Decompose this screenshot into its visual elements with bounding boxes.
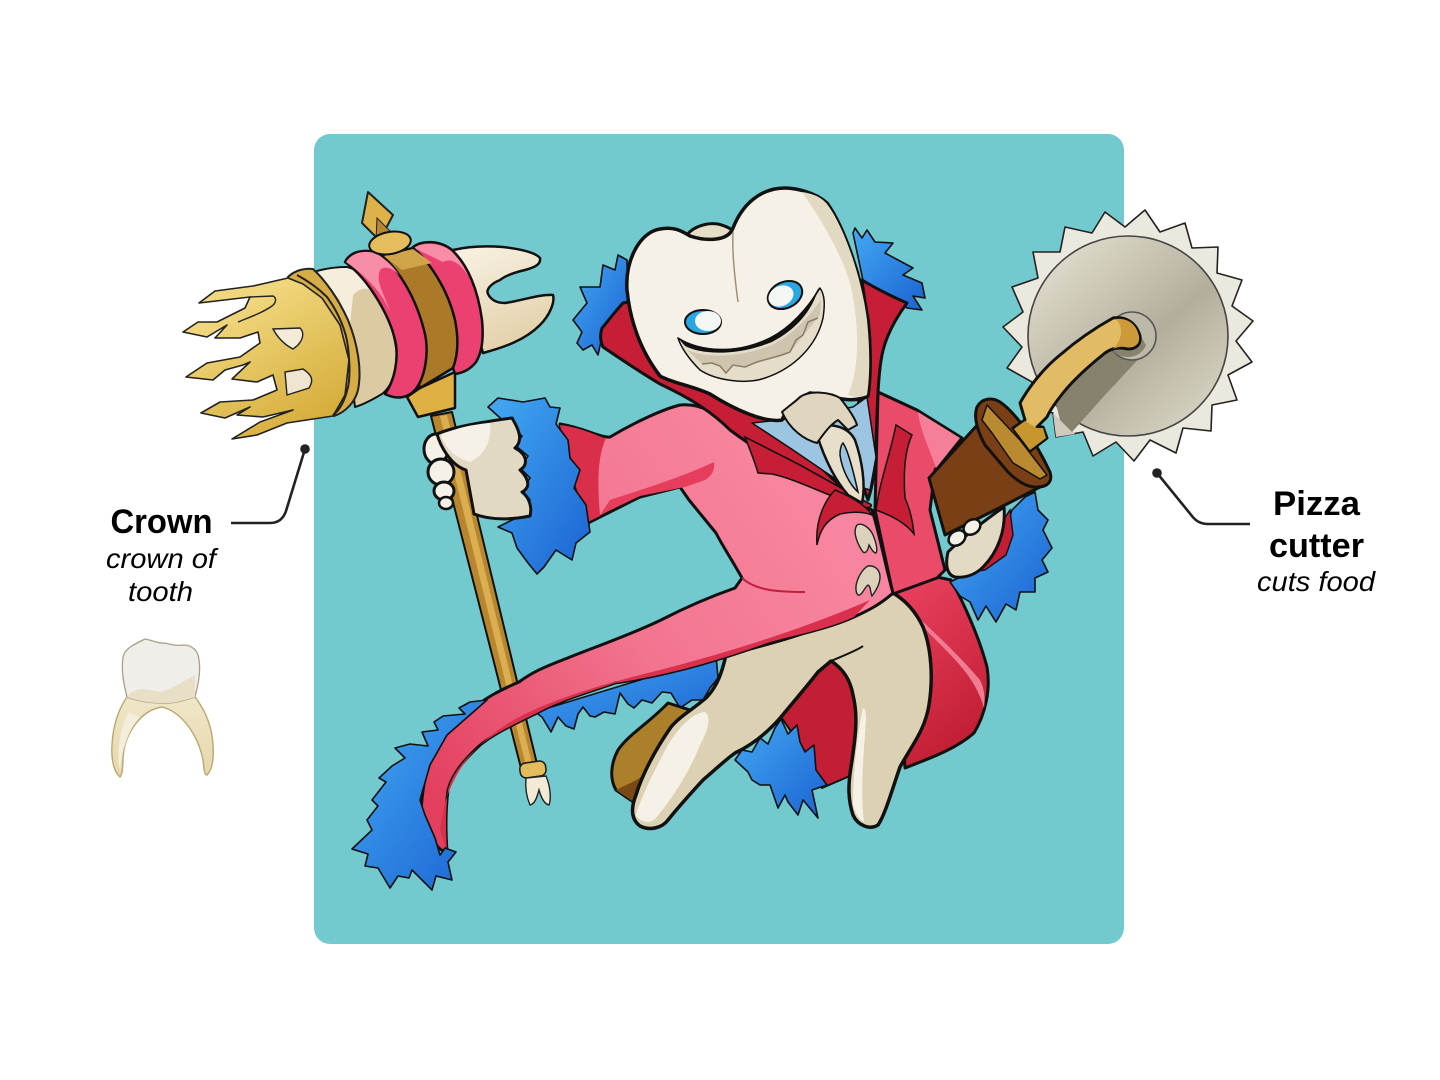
wooden club	[612, 703, 690, 801]
lower lapel red	[817, 490, 872, 545]
outer tail	[893, 577, 988, 768]
left sleeve cuff fur	[488, 398, 590, 574]
coat right side and shoulder	[875, 392, 962, 594]
right lapel red	[876, 425, 914, 534]
bottom ring	[519, 760, 547, 779]
root shape	[633, 593, 931, 828]
head shape	[627, 188, 870, 420]
mouth inner shade	[687, 300, 821, 373]
tie roots	[817, 425, 864, 503]
tie: tooth cravat	[782, 393, 864, 503]
description line 1: crown of	[106, 543, 219, 574]
wheel serrated edge	[1003, 210, 1253, 461]
cream segment	[317, 267, 397, 407]
wheel inner disc	[1028, 236, 1228, 436]
right root highlight	[853, 708, 866, 822]
finger 4	[439, 497, 453, 509]
leader dot	[300, 444, 310, 454]
tie knot	[782, 393, 857, 443]
coat buttons: small teeth	[855, 524, 880, 596]
knob	[367, 229, 413, 257]
finger 1	[424, 434, 448, 464]
hub shadow	[1112, 335, 1146, 357]
label: Pizza cutter	[1257, 485, 1376, 597]
root inner light	[118, 712, 140, 770]
collar and lapels	[601, 280, 914, 545]
handle body	[929, 422, 1040, 535]
heading: Crown: Crown	[110, 503, 212, 541]
tail fold highlight	[893, 593, 985, 708]
tooth crown	[122, 639, 200, 703]
finger 3	[434, 482, 454, 500]
left root highlight	[636, 712, 709, 822]
crown gold with spikes	[183, 278, 349, 439]
shaft highlight	[440, 415, 533, 770]
collar fur right	[853, 228, 925, 310]
lower sleeve shade	[600, 462, 714, 515]
tooth roots	[112, 697, 213, 777]
legs: tooth roots	[633, 593, 931, 828]
cap gold rim	[982, 405, 1047, 479]
finger 2	[428, 459, 454, 485]
pink ring left highlight	[346, 252, 403, 312]
coat right highlight	[918, 412, 960, 468]
right glove hand	[946, 507, 1004, 577]
icon: molar tooth	[112, 639, 213, 777]
head shade right	[802, 192, 869, 397]
label: Crown	[106, 503, 219, 607]
smile mouth	[678, 288, 824, 381]
crown band	[288, 269, 360, 416]
collar fur left	[573, 255, 628, 355]
tail end fur	[352, 700, 487, 890]
tail fur behind coat	[535, 655, 718, 732]
finger lower	[946, 527, 968, 549]
spike inner outline	[238, 296, 276, 322]
right cuff red lining	[972, 510, 1013, 572]
cuff-end dark red	[560, 425, 606, 522]
left collar	[601, 300, 858, 503]
upper button	[855, 524, 877, 553]
leader path	[1157, 473, 1250, 524]
palm	[437, 418, 531, 519]
right cuff fur	[950, 492, 1052, 622]
bottom mini tooth	[526, 776, 550, 805]
crown opening bottom	[285, 369, 312, 395]
leg crease	[831, 646, 863, 661]
body crease	[742, 578, 805, 592]
band light edge	[384, 249, 432, 270]
head wrinkle	[733, 232, 738, 302]
brown cutter handle	[929, 399, 1051, 535]
back cusp	[685, 224, 735, 241]
handle shadow on disc	[1055, 350, 1145, 432]
right eye	[763, 276, 807, 314]
panel: teal background	[314, 134, 1124, 944]
cream highlight	[317, 268, 380, 345]
arm base shade	[1014, 421, 1046, 450]
hand palm	[947, 507, 1004, 577]
left eye	[685, 310, 721, 334]
right collar	[850, 280, 907, 500]
pink ring right highlight	[414, 244, 468, 276]
heading line 1: Pizza	[1273, 485, 1361, 523]
pink ring right	[413, 242, 483, 374]
description: cuts food	[1257, 566, 1376, 597]
spear tip	[362, 192, 393, 238]
wheel outer shade near handle	[1053, 413, 1075, 437]
left glove hand	[424, 418, 531, 519]
sleeve shading	[440, 425, 870, 852]
tie slot	[840, 443, 858, 492]
tooth roots end	[453, 246, 553, 353]
crown shade	[127, 675, 195, 703]
head: tooth face	[627, 188, 870, 420]
gold collar	[407, 372, 455, 417]
staff lower handle behind leg	[612, 703, 690, 801]
wheel hub	[1108, 312, 1156, 360]
arm tip shade	[1113, 319, 1139, 349]
staff head: tooth hammer with golden crown	[183, 192, 553, 439]
coat main: sleeve, body and long tail	[421, 405, 893, 852]
callout: Crown leader line	[231, 444, 310, 523]
left lapel	[745, 437, 871, 508]
inner tail shade	[440, 600, 870, 852]
leader dot	[1152, 468, 1162, 478]
pizza cutter wheel	[1003, 210, 1253, 461]
crown band inner line	[297, 275, 350, 415]
heading line 2: cutter	[1269, 527, 1364, 565]
lower button	[856, 566, 880, 596]
crown opening top	[273, 328, 303, 349]
shaft	[431, 412, 538, 772]
pink ring left	[345, 251, 427, 397]
arm	[1013, 318, 1140, 451]
handle cap	[976, 399, 1051, 487]
leader path	[231, 449, 305, 523]
golden band	[383, 248, 457, 388]
right coat tail	[893, 577, 988, 768]
palm highlight	[441, 423, 490, 462]
club shade	[616, 770, 650, 801]
description line 2: tooth	[128, 576, 193, 607]
shirt	[752, 397, 876, 490]
spear inner	[376, 218, 394, 240]
back coat red between legs	[781, 660, 860, 788]
cutter gold arm	[1013, 318, 1140, 451]
staff	[431, 412, 550, 805]
teeth line	[702, 318, 818, 373]
back fur near legs	[735, 719, 827, 818]
finger upper	[961, 516, 983, 538]
mouth top line	[677, 287, 819, 353]
callout: Pizza cutter leader line	[1152, 468, 1250, 524]
